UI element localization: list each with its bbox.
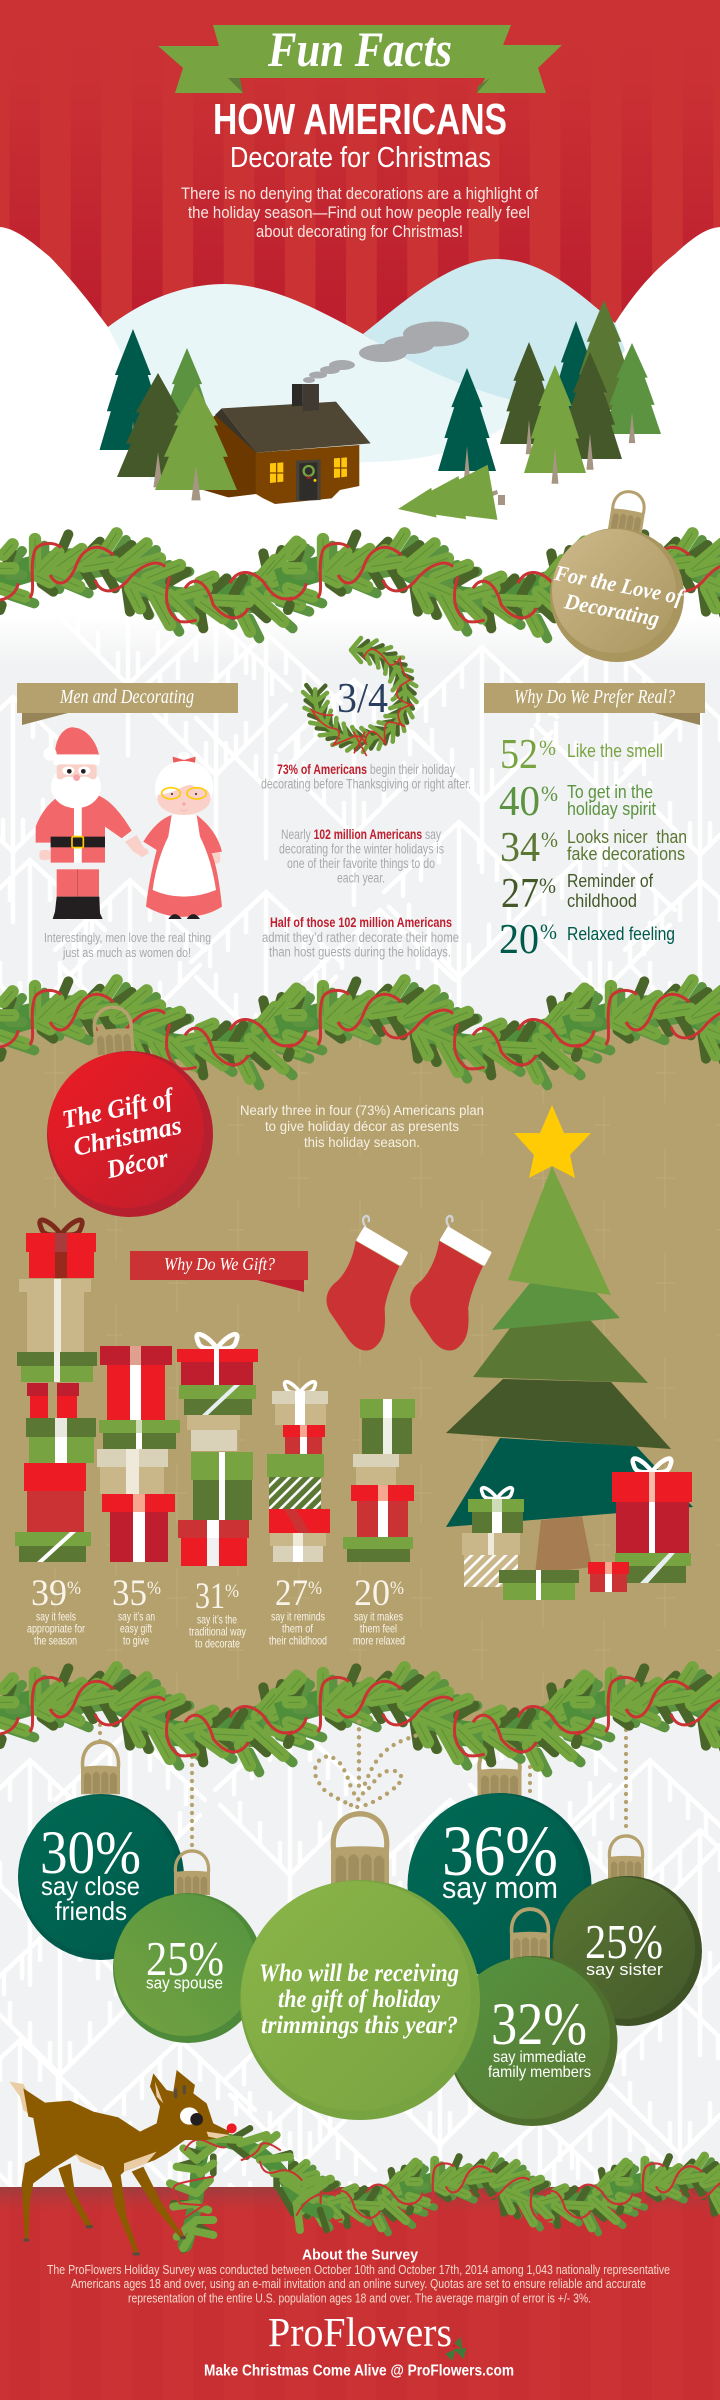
footer red panel <box>0 2187 720 2400</box>
ornament: 25% spouse: 25% <box>146 1931 224 1986</box>
fact: 102 million Americans: one of their favorite things to do <box>287 856 435 871</box>
ornament: 25% spouse: say spouse <box>146 1974 223 1992</box>
ribbon heading: Why Do We Gift? <box>130 1251 308 1292</box>
stat: 52% like the smell <box>500 732 663 778</box>
gift stack 20% <box>343 1399 415 1562</box>
stat: 35% <box>112 1573 161 1648</box>
ornament: For the Love of Decorating: For the Love of <box>552 560 688 610</box>
dotted heart string <box>315 1722 416 1807</box>
stat: 31% <box>189 1576 246 1650</box>
trees on the right <box>438 300 661 484</box>
fact: half of those <box>262 915 459 960</box>
trees left of the cabin <box>100 329 215 487</box>
stat: 35%: easy gift <box>120 1622 152 1636</box>
stat: 34% looks nicer <box>500 825 687 871</box>
garland 3 <box>0 1667 720 1772</box>
illustration: Mrs. Claus <box>137 752 222 919</box>
stat: 20%: say it makes <box>354 1610 403 1624</box>
stat: 39%: 39 <box>31 1573 67 1614</box>
stat: 31%: traditional way <box>189 1624 246 1638</box>
ProFlowers logo: ProFlowers <box>268 2309 452 2355</box>
stat: 35%: 35 <box>112 1573 147 1614</box>
stat: 39%: the season <box>34 1634 77 1648</box>
stat: 20%: more relaxed <box>353 1634 405 1648</box>
garland 1 <box>0 533 720 638</box>
stat: 31%: 31 <box>195 1576 225 1617</box>
ornament strings <box>100 1725 626 1850</box>
about the survey: About the Survey <box>302 2246 419 2264</box>
stat: 27% reminder of childhood: 27 <box>501 871 539 917</box>
stat: 27%: their childhood <box>269 1634 327 1648</box>
stat: 27% reminder of childhood: childhood <box>567 891 637 911</box>
ornament: who will be receiving: the gift of holiday <box>278 1986 441 2013</box>
subheading: Decorate for Christmas: Decorate for Christmas <box>230 142 491 174</box>
christmas tree <box>446 1105 693 1574</box>
stat: 27% reminder of childhood: Reminder of <box>567 871 654 891</box>
stat: 20% relaxed feeling: 20 <box>499 917 539 963</box>
stockings <box>327 1216 490 1351</box>
icon: holly <box>447 2339 465 2359</box>
stat: 35%: to give <box>123 1634 149 1648</box>
ornament: 32% immediate family <box>448 1909 618 2126</box>
stat: 35%: say it’s an <box>118 1610 155 1624</box>
ornament: 36% mom: say mom <box>442 1870 558 1905</box>
intro paragraph: the holiday season—Find out how people really feel <box>188 203 530 222</box>
fact: 73% of Americans: decorating before Thanksgiving or right after. <box>261 776 471 792</box>
stat: 27%: say it reminds <box>271 1610 325 1624</box>
tan gift section background <box>0 1005 720 1736</box>
gift stats row <box>27 1573 405 1650</box>
ornament: 30% close friends: 30% <box>40 1820 141 1887</box>
cabin <box>203 384 371 504</box>
pattern: white trees behind first white section <box>0 530 720 1135</box>
stat: 39% <box>27 1573 85 1648</box>
fact: 73% of Americans <box>261 762 471 792</box>
header red striped background <box>0 0 720 360</box>
lower garland <box>192 2156 720 2233</box>
caption: men love the real thing: Interestingly, men love the real thing <box>44 930 211 945</box>
ornament: who will be receiving: trimmings this year? <box>261 2012 458 2039</box>
intro paragraph: about decorating for Christmas! <box>256 222 463 241</box>
stat: 34% looks nicer: Looks nicer than <box>567 827 687 847</box>
stat: 27% <box>269 1573 327 1648</box>
ornament: who will be receiving <box>240 1814 480 2120</box>
stat: 34% looks nicer: fake decorations <box>567 844 685 864</box>
garland 2 <box>0 980 720 1085</box>
ornament: 25% spouse <box>113 1851 263 2043</box>
fact: 102 million Americans: Nearly 102 million Americans say <box>281 827 441 842</box>
ornament: 36% mom <box>408 1745 592 1977</box>
ornament: who will be receiving: Who will be receiving <box>259 1960 459 1987</box>
intro paragraph: There is no denying that decorations are a highlight of <box>181 184 538 203</box>
fact: half of those: Half of those 102 million Americans <box>270 915 452 930</box>
stat: 39%: say it feels <box>36 1610 76 1624</box>
stat: 40% holiday spirit: To get in the <box>567 782 653 802</box>
ornament: 32% immediate family: 32% <box>491 1991 587 2057</box>
gifts under the tree <box>462 1459 692 1600</box>
wreath with 3/4: 3/4 <box>337 676 388 722</box>
title ribbon: Fun Facts <box>158 21 562 93</box>
stat: 20%: % <box>390 1578 404 1599</box>
ornament: The Gift of Christmas Decor: Christmas <box>71 1110 184 1162</box>
stat: 35%: % <box>147 1578 161 1599</box>
stat: 52% like the smell: Like the smell <box>567 741 663 761</box>
stat: 20% relaxed feeling: Relaxed feeling <box>567 924 675 944</box>
stat: 20% relaxed feeling <box>499 917 675 963</box>
heading: How Americans: HOW AMERICANS <box>213 95 507 144</box>
ornament: 30% close friends: friends <box>55 1896 127 1926</box>
intro: nearly three in four <box>240 1102 484 1150</box>
title text: Fun Facts: Fun Facts <box>267 21 452 77</box>
ornament: 25% sister <box>552 1836 702 2026</box>
panel: men and decorating <box>17 683 238 960</box>
ribbon heading: Men and Decorating <box>17 683 238 725</box>
stat: 31%: % <box>225 1581 239 1602</box>
smoke clouds <box>303 322 469 383</box>
ornament: The Gift of Christmas Decor <box>47 1006 213 1217</box>
panel: three-quarters facts <box>261 638 471 960</box>
fact: half of those: than host guests during the holidays. <box>269 944 451 960</box>
stat: 27%: them of <box>282 1622 314 1636</box>
stat: 34% looks nicer: 34 <box>500 825 540 871</box>
ribbon heading: Men and Decorating: Men and Decorating <box>59 686 194 708</box>
ornament: 30% close friends <box>18 1742 184 1960</box>
stat: 39%: appropriate for <box>27 1622 85 1636</box>
tree beside the cabin <box>155 386 237 500</box>
star <box>514 1105 591 1178</box>
garland in deer's mouth <box>170 2128 337 2250</box>
intro: nearly three in four: this holiday season. <box>304 1134 420 1150</box>
caption: men love the real thing <box>44 930 211 960</box>
panel: why do we prefer real <box>484 683 705 963</box>
about the survey: representation of the entire U.S. population ages 18 and over. The average margin of error is +/- 3%. <box>128 2292 591 2306</box>
fact: 102 million Americans: decorating for the winter holidays is <box>279 842 444 856</box>
stat: 31%: to decorate <box>195 1636 240 1650</box>
ribbon heading: Why Do We Gift?: Why Do We Gift? <box>164 1254 275 1274</box>
gift stack 39% <box>15 1220 97 1562</box>
ribbon heading: Why Do We Prefer Real?: Why Do We Prefer Real? <box>514 686 675 708</box>
stat: 20%: them feel <box>360 1622 397 1636</box>
ornament: For the Love of Decorating: Decorating <box>562 588 662 631</box>
stat: 20%: 20 <box>354 1573 390 1614</box>
tagline: Make Christmas Come Alive @ ProFlowers.com <box>204 2362 514 2380</box>
stat: 27% reminder of childhood: % <box>539 873 556 898</box>
stat: 20% relaxed feeling: % <box>540 919 557 944</box>
fact: 102 million Americans <box>279 827 444 886</box>
stat: 40% holiday spirit: holiday spirit <box>567 799 656 819</box>
ornament: The Gift of Christmas Decor: Décor <box>103 1143 171 1184</box>
stat: 34% looks nicer: % <box>541 827 558 852</box>
gift stack 27% <box>267 1382 330 1562</box>
ornament: The Gift of Christmas Decor: The Gift of <box>60 1082 177 1134</box>
fact: 73% of Americans: 73% of Americans begin their holiday <box>277 762 455 777</box>
wreath with 3/4 <box>303 638 418 756</box>
ornament: 25% sister: say sister <box>586 1960 663 1979</box>
stat: 40% holiday spirit: 40 <box>499 779 540 825</box>
stat: 31%: say it’s the <box>197 1612 237 1626</box>
about the survey <box>47 2246 670 2306</box>
ornament: 32% immediate family: say immediate <box>493 2049 586 2066</box>
ornament: 36% mom: 36% <box>442 1811 558 1891</box>
stat: 40% holiday spirit <box>499 779 656 825</box>
intro: nearly three in four: to give holiday décor as presents <box>265 1118 459 1134</box>
ribbon heading: Why Do We Prefer Real? <box>484 683 705 725</box>
ornament: 25% sister: 25% <box>585 1914 663 1969</box>
snow landscape <box>0 227 720 615</box>
intro: nearly three in four: Nearly three in four (73%) Americans plan <box>240 1102 484 1118</box>
deer <box>9 2070 337 2254</box>
caption: men love the real thing: just as much as women do! <box>62 945 191 960</box>
intro paragraph <box>181 184 538 241</box>
fact: 102 million Americans: each year. <box>337 870 385 886</box>
stat: 52% like the smell: 52 <box>500 732 538 778</box>
stat: 20% <box>353 1573 405 1648</box>
pattern: white trees behind recipients section <box>0 1700 720 2345</box>
stat: 27%: 27 <box>275 1573 308 1614</box>
ornament: 30% close friends: say close <box>41 1871 140 1901</box>
gift stack 31% <box>177 1334 258 1566</box>
stat: 40% holiday spirit: % <box>541 781 558 806</box>
stat: 52% like the smell: % <box>539 735 556 760</box>
stat: 39%: % <box>67 1578 81 1599</box>
illustration: Santa <box>36 727 148 919</box>
gift stack 35% <box>97 1346 180 1562</box>
ornament: For the Love of Decorating <box>547 489 688 662</box>
felled tree <box>393 465 505 537</box>
ornament: 32% immediate family: family members <box>488 2064 591 2081</box>
stat: 27%: % <box>308 1578 322 1599</box>
fact: half of those: admit they’d rather decorate their home <box>262 930 459 945</box>
stat: 27% reminder of childhood <box>501 871 654 917</box>
